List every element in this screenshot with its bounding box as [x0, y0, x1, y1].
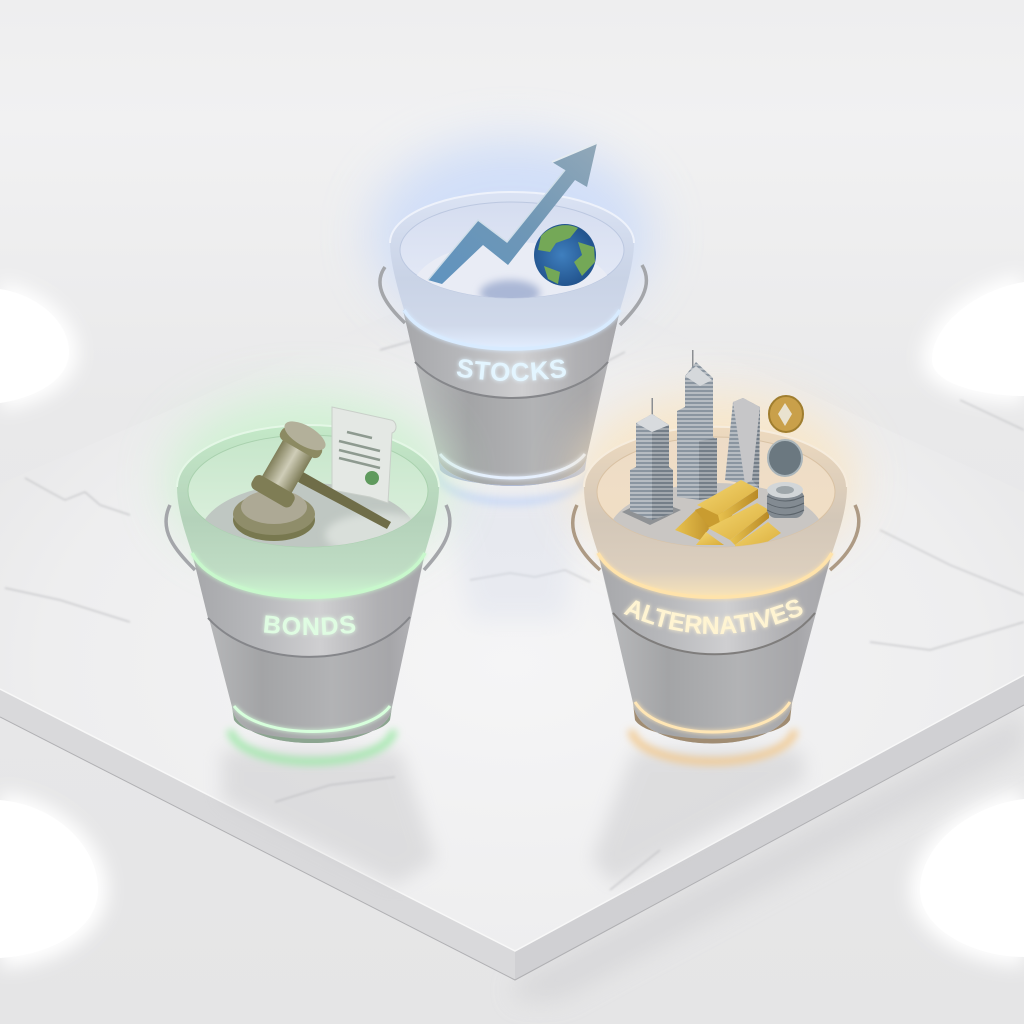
platform top — [0, 312, 1024, 951]
reflection: stocks — [445, 490, 580, 620]
label: alternatives: ALTERNATIVES — [622, 597, 805, 636]
base ring — [438, 456, 587, 486]
glass rim — [584, 427, 847, 597]
glass rim — [390, 192, 634, 349]
bucket: stocks — [361, 125, 663, 508]
metal body — [192, 553, 425, 743]
icon: document scroll — [332, 407, 396, 503]
platform side right — [515, 675, 1024, 980]
label: stocks: STOCKS — [456, 357, 568, 383]
base glow — [436, 472, 590, 502]
base ring — [633, 703, 792, 744]
reflection: alternatives — [592, 750, 805, 884]
halo — [576, 395, 856, 565]
halo — [168, 395, 448, 565]
icon: gavel — [233, 416, 391, 541]
band line — [415, 362, 608, 398]
label band — [403, 310, 620, 398]
platform side left — [0, 689, 515, 980]
band line — [208, 617, 410, 657]
glowing orbs — [0, 274, 1024, 968]
handles — [573, 505, 859, 570]
base ring — [232, 707, 392, 743]
metal body — [598, 553, 832, 744]
icon: rising arrow — [428, 143, 597, 284]
label: bonds: BONDS — [262, 614, 358, 637]
glass rim — [177, 425, 439, 597]
icon: gold bars — [675, 480, 781, 550]
label band — [192, 553, 425, 657]
handles — [380, 265, 646, 325]
bucket: bonds — [158, 382, 470, 770]
label band — [598, 553, 832, 654]
icon: globe — [534, 224, 596, 286]
base glow — [230, 730, 394, 762]
marble platform — [0, 312, 1024, 1000]
icon: skyscrapers — [622, 350, 760, 525]
metal body — [403, 310, 620, 486]
handles — [166, 505, 450, 570]
platform shadow — [515, 712, 1024, 1000]
band line — [613, 613, 815, 654]
icon: coins — [767, 396, 804, 518]
base glow — [631, 730, 795, 762]
halo — [372, 140, 652, 330]
bucket: alternatives — [554, 350, 872, 770]
reflection: bonds — [222, 750, 436, 885]
